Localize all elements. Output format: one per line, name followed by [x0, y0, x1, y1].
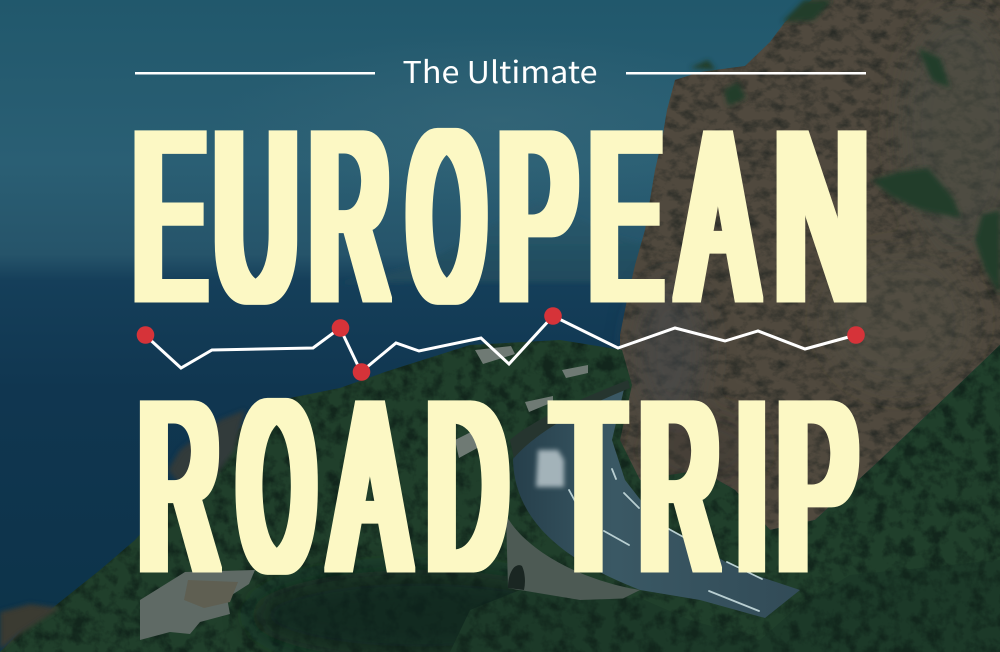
- subtitle text: The Ultimate: [402, 48, 598, 92]
- road wall: [510, 380, 630, 458]
- headline: EUROPEAN: E: [591, 81, 660, 352]
- cliff tonal patches: [635, 10, 1000, 490]
- road markings: [569, 469, 762, 611]
- stop markers: [137, 307, 865, 381]
- dark valley shadow: [250, 570, 590, 652]
- headline: EUROPEAN: O: [410, 81, 483, 352]
- headline: ROAD TRIP: D: [428, 351, 506, 622]
- road: [513, 385, 800, 618]
- route line with stops: [137, 307, 865, 381]
- right rule: [626, 72, 866, 74]
- foreground trees: [450, 560, 1000, 652]
- left rule: [135, 72, 375, 74]
- stone bridge: [506, 515, 640, 600]
- route path: [145, 316, 856, 372]
- headline: ROAD TRIP: O: [240, 351, 313, 622]
- headline: EUROPEAN: A: [681, 81, 755, 352]
- headline: EUROPEAN: P: [499, 81, 576, 352]
- plants on cliff: [690, 0, 1000, 295]
- headline: ROAD TRIP: [140, 351, 860, 622]
- headline: EUROPEAN: [134, 81, 868, 352]
- cliff: [618, 0, 1000, 530]
- headline: ROAD TRIP: T: [554, 351, 623, 622]
- buildings: [140, 570, 255, 640]
- headline: ROAD TRIP: R: [140, 351, 218, 622]
- distant mountain: [340, 202, 650, 283]
- greenery: coast and foreground: [0, 340, 1000, 652]
- headline: ROAD TRIP: A: [333, 351, 407, 622]
- headline: EUROPEAN: U: [215, 81, 297, 352]
- headline: EUROPEAN: R: [310, 81, 388, 352]
- small rocks: [168, 410, 245, 490]
- headline: EUROPEAN: E: [135, 81, 204, 352]
- car: [536, 450, 564, 487]
- headline: ROAD TRIP: I: [739, 351, 765, 622]
- headline: EUROPEAN: N: [775, 81, 868, 352]
- headline: ROAD TRIP: R: [640, 351, 718, 622]
- headline: ROAD TRIP: P: [778, 351, 857, 622]
